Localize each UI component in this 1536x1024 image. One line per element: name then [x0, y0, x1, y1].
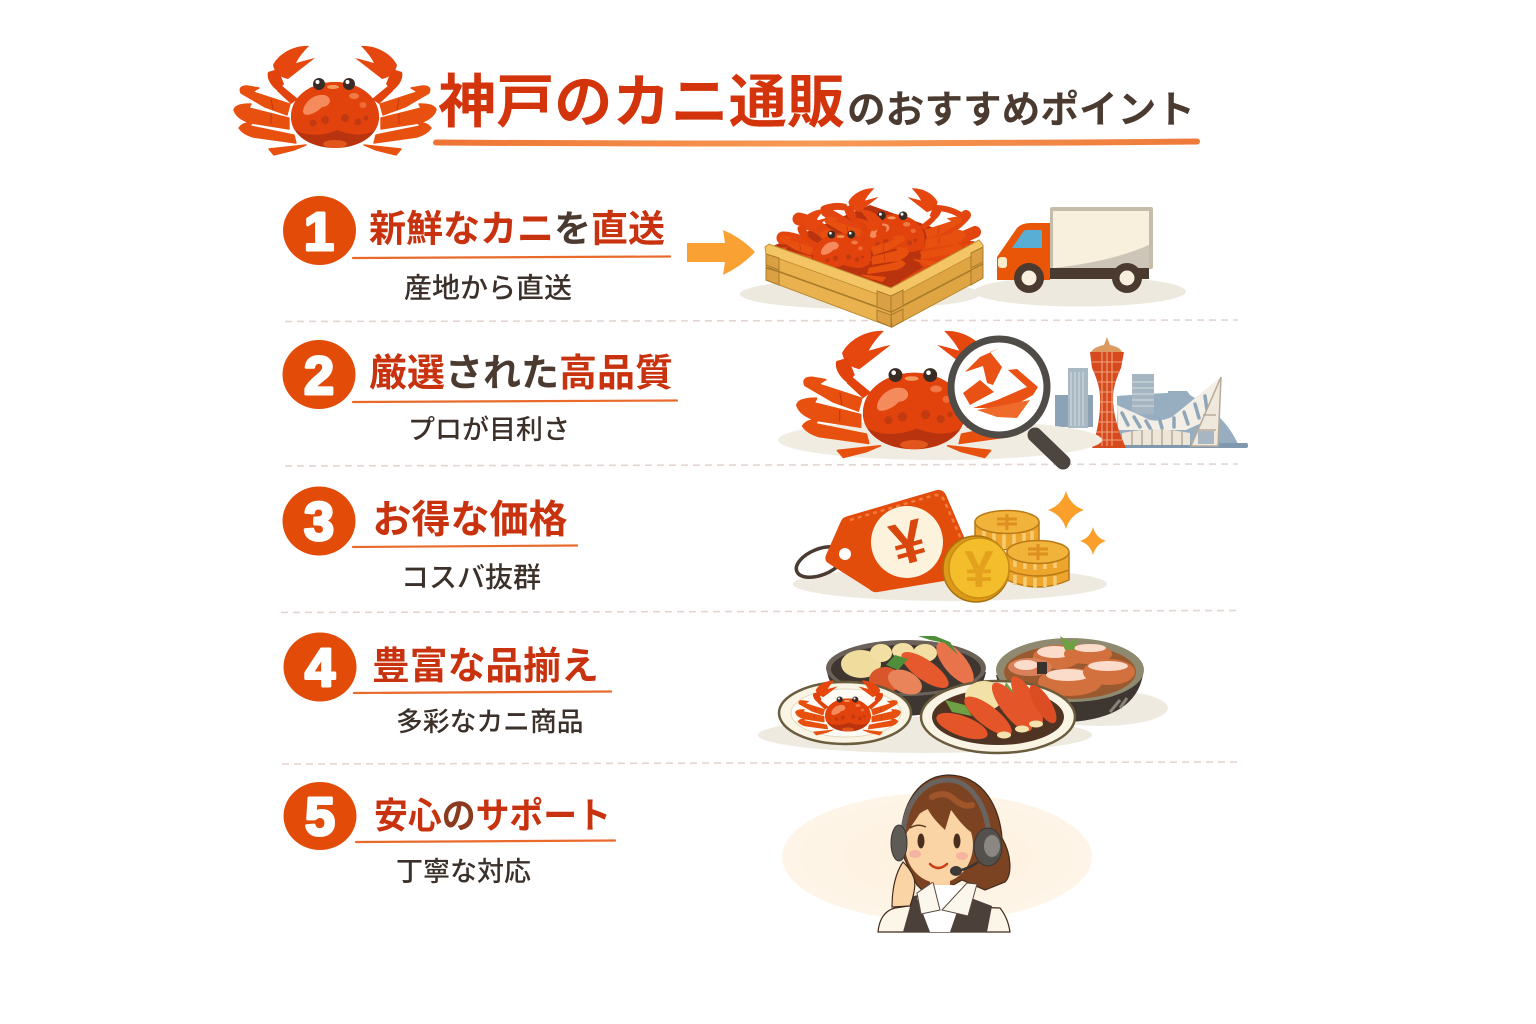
- delivery truck: [997, 207, 1153, 293]
- row 4: wide selection: [284, 632, 1168, 753]
- illustration: crab crate and truck: [740, 188, 1186, 327]
- heading underline 2: [353, 400, 677, 402]
- subtext 5: 丁寧な対応: [396, 857, 531, 887]
- number badge 5: 5: [305, 787, 335, 847]
- subtext 4: 多彩なカニ商品: [396, 707, 584, 737]
- illustration: crab, magnifier and Kobe skyline: [778, 331, 1248, 462]
- front coin: ¥: [965, 541, 994, 599]
- icon: title crab: [234, 46, 436, 155]
- magnifying glass: [951, 339, 1063, 462]
- plate with crab legs: [921, 672, 1075, 753]
- number badge 2: [282, 340, 356, 409]
- maritime museum roof: [1117, 376, 1222, 446]
- sparkle large: [1048, 491, 1084, 529]
- subtext 3: コスバ抜群: [401, 562, 541, 593]
- subtext 2: プロが目利さ: [408, 415, 570, 445]
- arrow: [687, 230, 755, 275]
- coin stacks: [975, 510, 1069, 588]
- illustration: crab dishes: [758, 636, 1168, 753]
- key ring: [792, 541, 848, 583]
- price tag: [825, 490, 980, 592]
- number badge 3: 3: [304, 492, 334, 552]
- heading 4: 豊富な品揃え: [372, 646, 599, 688]
- number badge 4: [284, 632, 356, 702]
- heading 1: 新鮮なカニを直送: [369, 208, 665, 250]
- title: 神戸のカニ通販: [438, 70, 845, 135]
- heading underline 4: [354, 692, 611, 693]
- number badge 2: 2: [304, 346, 334, 406]
- Kobe port tower: [1090, 337, 1126, 448]
- price tag: ¥: [883, 506, 934, 579]
- row 1: fresh direct delivery: [283, 188, 1186, 327]
- row 2: selected quality: [282, 331, 1248, 462]
- shadow: [793, 567, 1107, 601]
- operator woman: [878, 775, 1010, 932]
- heading underline 5: [356, 840, 615, 842]
- truck shadow: [974, 276, 1186, 306]
- plate with crab: [779, 680, 911, 744]
- title: のおすすめポイント: [847, 89, 1195, 132]
- title: [438, 70, 1195, 135]
- crab shadow: [778, 420, 1102, 460]
- illustration: price tag and coins: [792, 490, 1107, 602]
- illustration: support operator: [782, 775, 1092, 932]
- number badge 1: [283, 196, 356, 265]
- number badge 5: [284, 782, 356, 850]
- food shadows: [758, 690, 1168, 753]
- front coin: [943, 536, 1009, 602]
- backdrop ellipse: [782, 793, 1092, 921]
- heading 3: お得な価格: [372, 499, 568, 542]
- subtext 1: 産地から直送: [404, 272, 572, 304]
- skyline buildings: [1055, 368, 1248, 448]
- row 5: support: [284, 775, 1092, 932]
- bowl back left: [826, 636, 986, 716]
- heading 2: 厳選された高品質: [369, 353, 673, 395]
- number badge 4: 4: [305, 638, 335, 698]
- heading underline 1: [353, 256, 670, 258]
- large crab: [797, 331, 1031, 457]
- row 3: good price: [282, 486, 1107, 602]
- wooden crate: [765, 240, 983, 327]
- number badge 3: [282, 486, 356, 556]
- number badge 1: 1: [304, 202, 334, 262]
- title underline: [436, 142, 1197, 144]
- crate shadow: [740, 279, 980, 309]
- bowl back right: [996, 636, 1144, 722]
- heading 5: 安心のサポート: [374, 795, 611, 836]
- sparkle small: [1080, 527, 1106, 555]
- heading underline 3: [353, 546, 577, 547]
- crabs in crate: [768, 188, 982, 298]
